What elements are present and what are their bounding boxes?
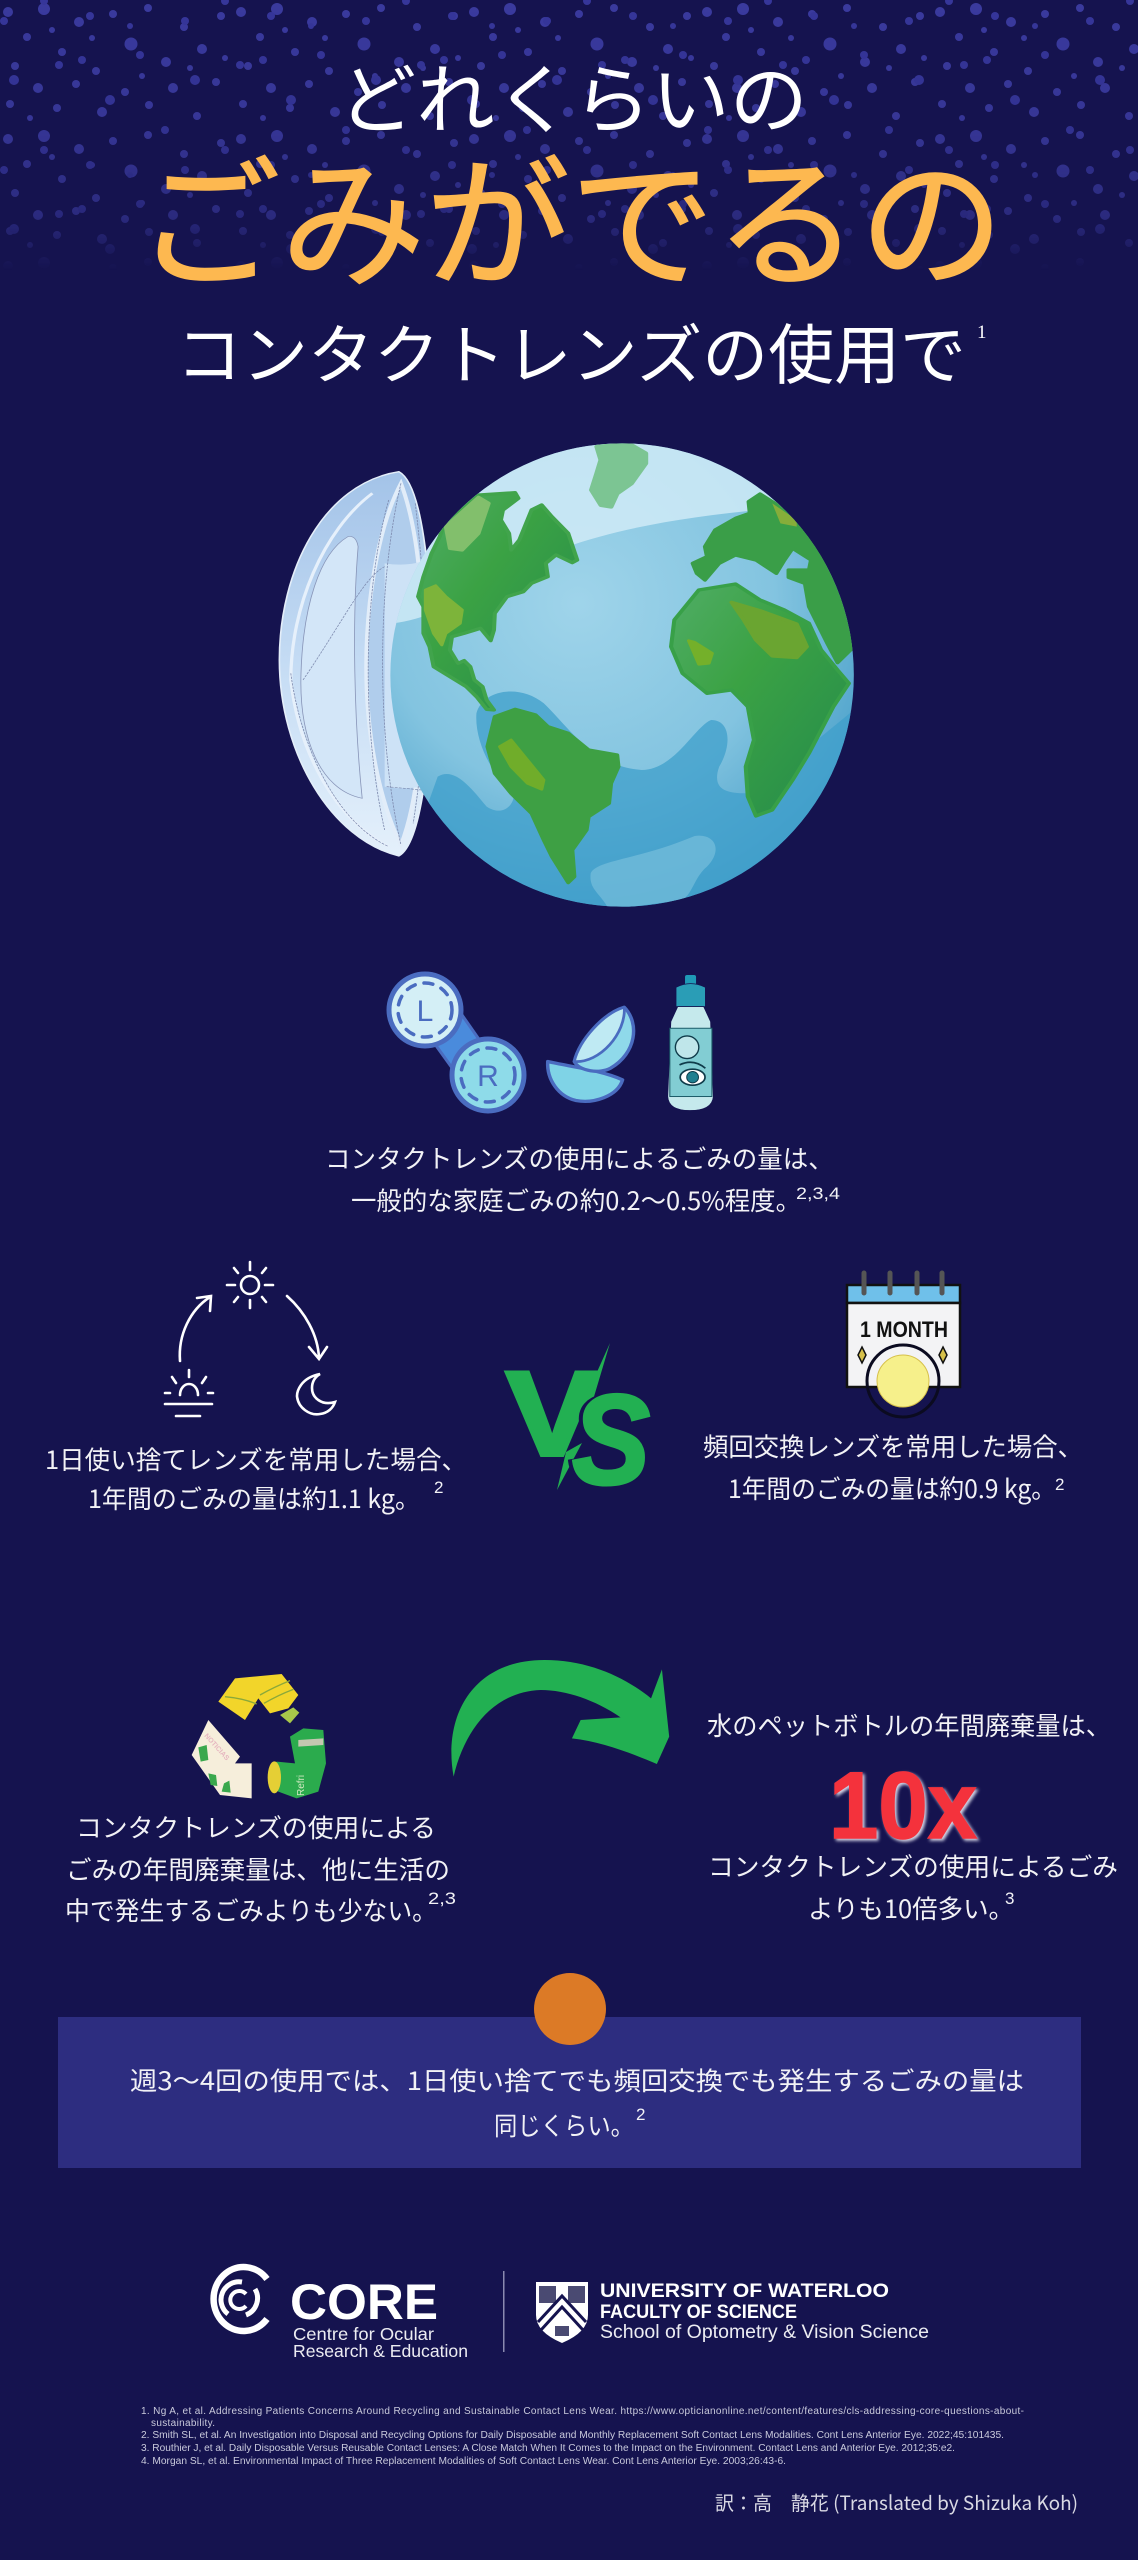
africa highlights	[731, 602, 807, 658]
logo: CORE: Research & Education	[293, 2341, 468, 2361]
yellow bottle	[218, 1674, 298, 1720]
references: 3. Routhier J, et al. Daily Disposable Versus Reusable Contact Lenses: A Close Match When It Comes to the Impact on the Environment. Contact Lens and Anterior Eye. 2012;35:e2.	[141, 2443, 955, 2454]
text: annual waste comparison: ごみの年間廃棄量は、他に生活の	[66, 1850, 450, 1887]
text: daily disposable: 1年間のごみの量は約1.1 kg。	[88, 1479, 420, 1516]
text: share of household waste: 一般的な家庭ごみの約0.2〜0.5%程度。	[351, 1181, 801, 1218]
title line 2: ごみがでるの	[136, 110, 1004, 316]
icon: shield	[536, 2282, 588, 2343]
translator credit: 訳：高 静花 (Translated by Shizuka Koh)	[715, 2487, 1078, 2516]
icon: recycling symbol: Refri	[296, 1775, 307, 1796]
text: plastic water bottles: よりも10倍多い。	[808, 1889, 1014, 1926]
arrow down to moon	[287, 1296, 327, 1359]
contact lens	[279, 472, 432, 856]
icon: CORE rings	[214, 2267, 267, 2331]
logo: University of Waterloo: School of Optometry & Vision Science	[600, 2322, 929, 2343]
logo: University of Waterloo: UNIVERSITY OF WATERLOO	[600, 2280, 889, 2302]
arrow up to sun	[180, 1296, 211, 1361]
text: plastic water bottles: コンタクトレンズの使用によるごみ	[708, 1847, 1118, 1884]
icon: VS: V	[506, 1347, 598, 1481]
panel: part-time use: 同じくらい。	[494, 2106, 634, 2143]
text: annual waste comparison: 2,3	[428, 1889, 456, 1908]
text: monthly replacement: 1年間のごみの量は約0.9 kg。	[728, 1469, 1056, 1506]
logo: University of Waterloo: FACULTY OF SCIENCE	[600, 2302, 797, 2323]
text: annual waste comparison: 中で発生するごみよりも少ない。	[65, 1891, 437, 1928]
superscript 1: 1	[977, 322, 986, 343]
newspaper	[192, 1720, 252, 1798]
text: daily disposable	[45, 1440, 467, 1516]
text: plastic water bottles: 3	[1005, 1889, 1014, 1908]
icon: contact lens case: L	[417, 995, 433, 1028]
north america	[418, 493, 577, 710]
greenland	[591, 444, 646, 507]
text: share of household waste: 2,3,4	[796, 1184, 840, 1203]
polar ice highlight	[396, 444, 783, 623]
panel: part-time use: 2	[636, 2105, 645, 2124]
europe and asia	[693, 494, 854, 663]
references: 4. Morgan SL, et al. Environmental Impact of Three Replacement Modalities of Soft Contact Lens Wear. Cont Lens Anterior Eye. 2003;26:43-6.	[141, 2456, 786, 2467]
text: monthly replacement: 頻回交換レンズを常用した場合、	[703, 1427, 1083, 1464]
references: sustainability.	[151, 2418, 215, 2429]
icon: curved green arrow	[451, 1660, 669, 1777]
icon: solution bottle	[668, 975, 713, 1111]
green can	[268, 1728, 326, 1798]
panel text: 週3〜4回の使用では、1日使い捨てでも頻回交換でも発生するごみの量は	[130, 2061, 1024, 2098]
text: annual waste comparison	[65, 1808, 456, 1928]
logo: CORE: Centre for Ocular	[293, 2324, 434, 2344]
south america highlight	[500, 740, 544, 789]
callout: 10x: 10x	[829, 1753, 977, 1859]
text: plastic water bottles	[707, 1706, 1118, 1926]
text: monthly replacement	[703, 1427, 1083, 1506]
icon: contact lens case: R	[477, 1060, 499, 1093]
light ocean patches	[590, 836, 716, 910]
dark ocean patches	[428, 692, 851, 907]
south america	[487, 709, 618, 883]
icon: monthly calendar	[847, 1273, 960, 1417]
calendar rings	[864, 1273, 942, 1293]
title line 3: コンタクトレンズの使用で	[176, 303, 966, 397]
icon: recycling symbol: NOTICIAS	[203, 1733, 230, 1762]
speckled star pattern	[0, 0, 1138, 270]
icon: VS: S	[572, 1369, 650, 1512]
ocean	[372, 437, 862, 913]
references: 2. Smith SL, et al. An Investigation into Disposal and Recycling Options for Daily Disposable and Monthly Replacement Soft Contact Lens Modalities. Cont Lens Anterior Eye. 2022;45:101435.	[141, 2430, 1004, 2441]
orange circle	[534, 1973, 606, 2045]
logo: University of Waterloo	[536, 2280, 929, 2343]
references: 1. Ng A, et al. Addressing Patients Concerns Around Recycling and Sustainable Contact Lens Wear. https://www.opticianonline.net/content/features/cls-addressing-core-questions-about-	[141, 2406, 1024, 2417]
text: share of household waste	[325, 1139, 840, 1218]
north america highlights	[446, 497, 489, 550]
illustration: contact lens and globe	[279, 437, 862, 913]
title line 1: どれくらいの	[338, 39, 808, 149]
text: daily disposable: 2	[434, 1478, 443, 1497]
text: annual waste comparison: コンタクトレンズの使用による	[76, 1808, 436, 1845]
logo: CORE	[214, 2267, 468, 2361]
logo: CORE: CORE	[290, 2274, 438, 2330]
icon: VS	[506, 1343, 650, 1512]
icon: two contact lenses	[548, 1007, 634, 1101]
calendar label: 1 MONTH	[860, 1317, 948, 1342]
eurasia highlight	[772, 503, 797, 527]
text: share of household waste: コンタクトレンズの使用によるごみの量は、	[325, 1139, 834, 1176]
icon: recycling symbol	[192, 1674, 326, 1798]
text: monthly replacement: 2	[1055, 1475, 1064, 1494]
sun	[227, 1262, 273, 1308]
text: plastic water bottles: 水のペットボトルの年間廃棄量は、	[707, 1706, 1111, 1743]
icon: contact lens case	[389, 974, 524, 1111]
moon	[297, 1374, 335, 1414]
references	[141, 2406, 1024, 2467]
globe	[372, 437, 862, 913]
sunrise	[165, 1370, 213, 1416]
africa	[671, 584, 849, 816]
text: daily disposable: 1日使い捨てレンズを常用した場合、	[45, 1440, 467, 1477]
title	[136, 39, 1004, 397]
icon: day cycle	[165, 1262, 335, 1416]
panel: part-time use	[58, 1973, 1081, 2168]
